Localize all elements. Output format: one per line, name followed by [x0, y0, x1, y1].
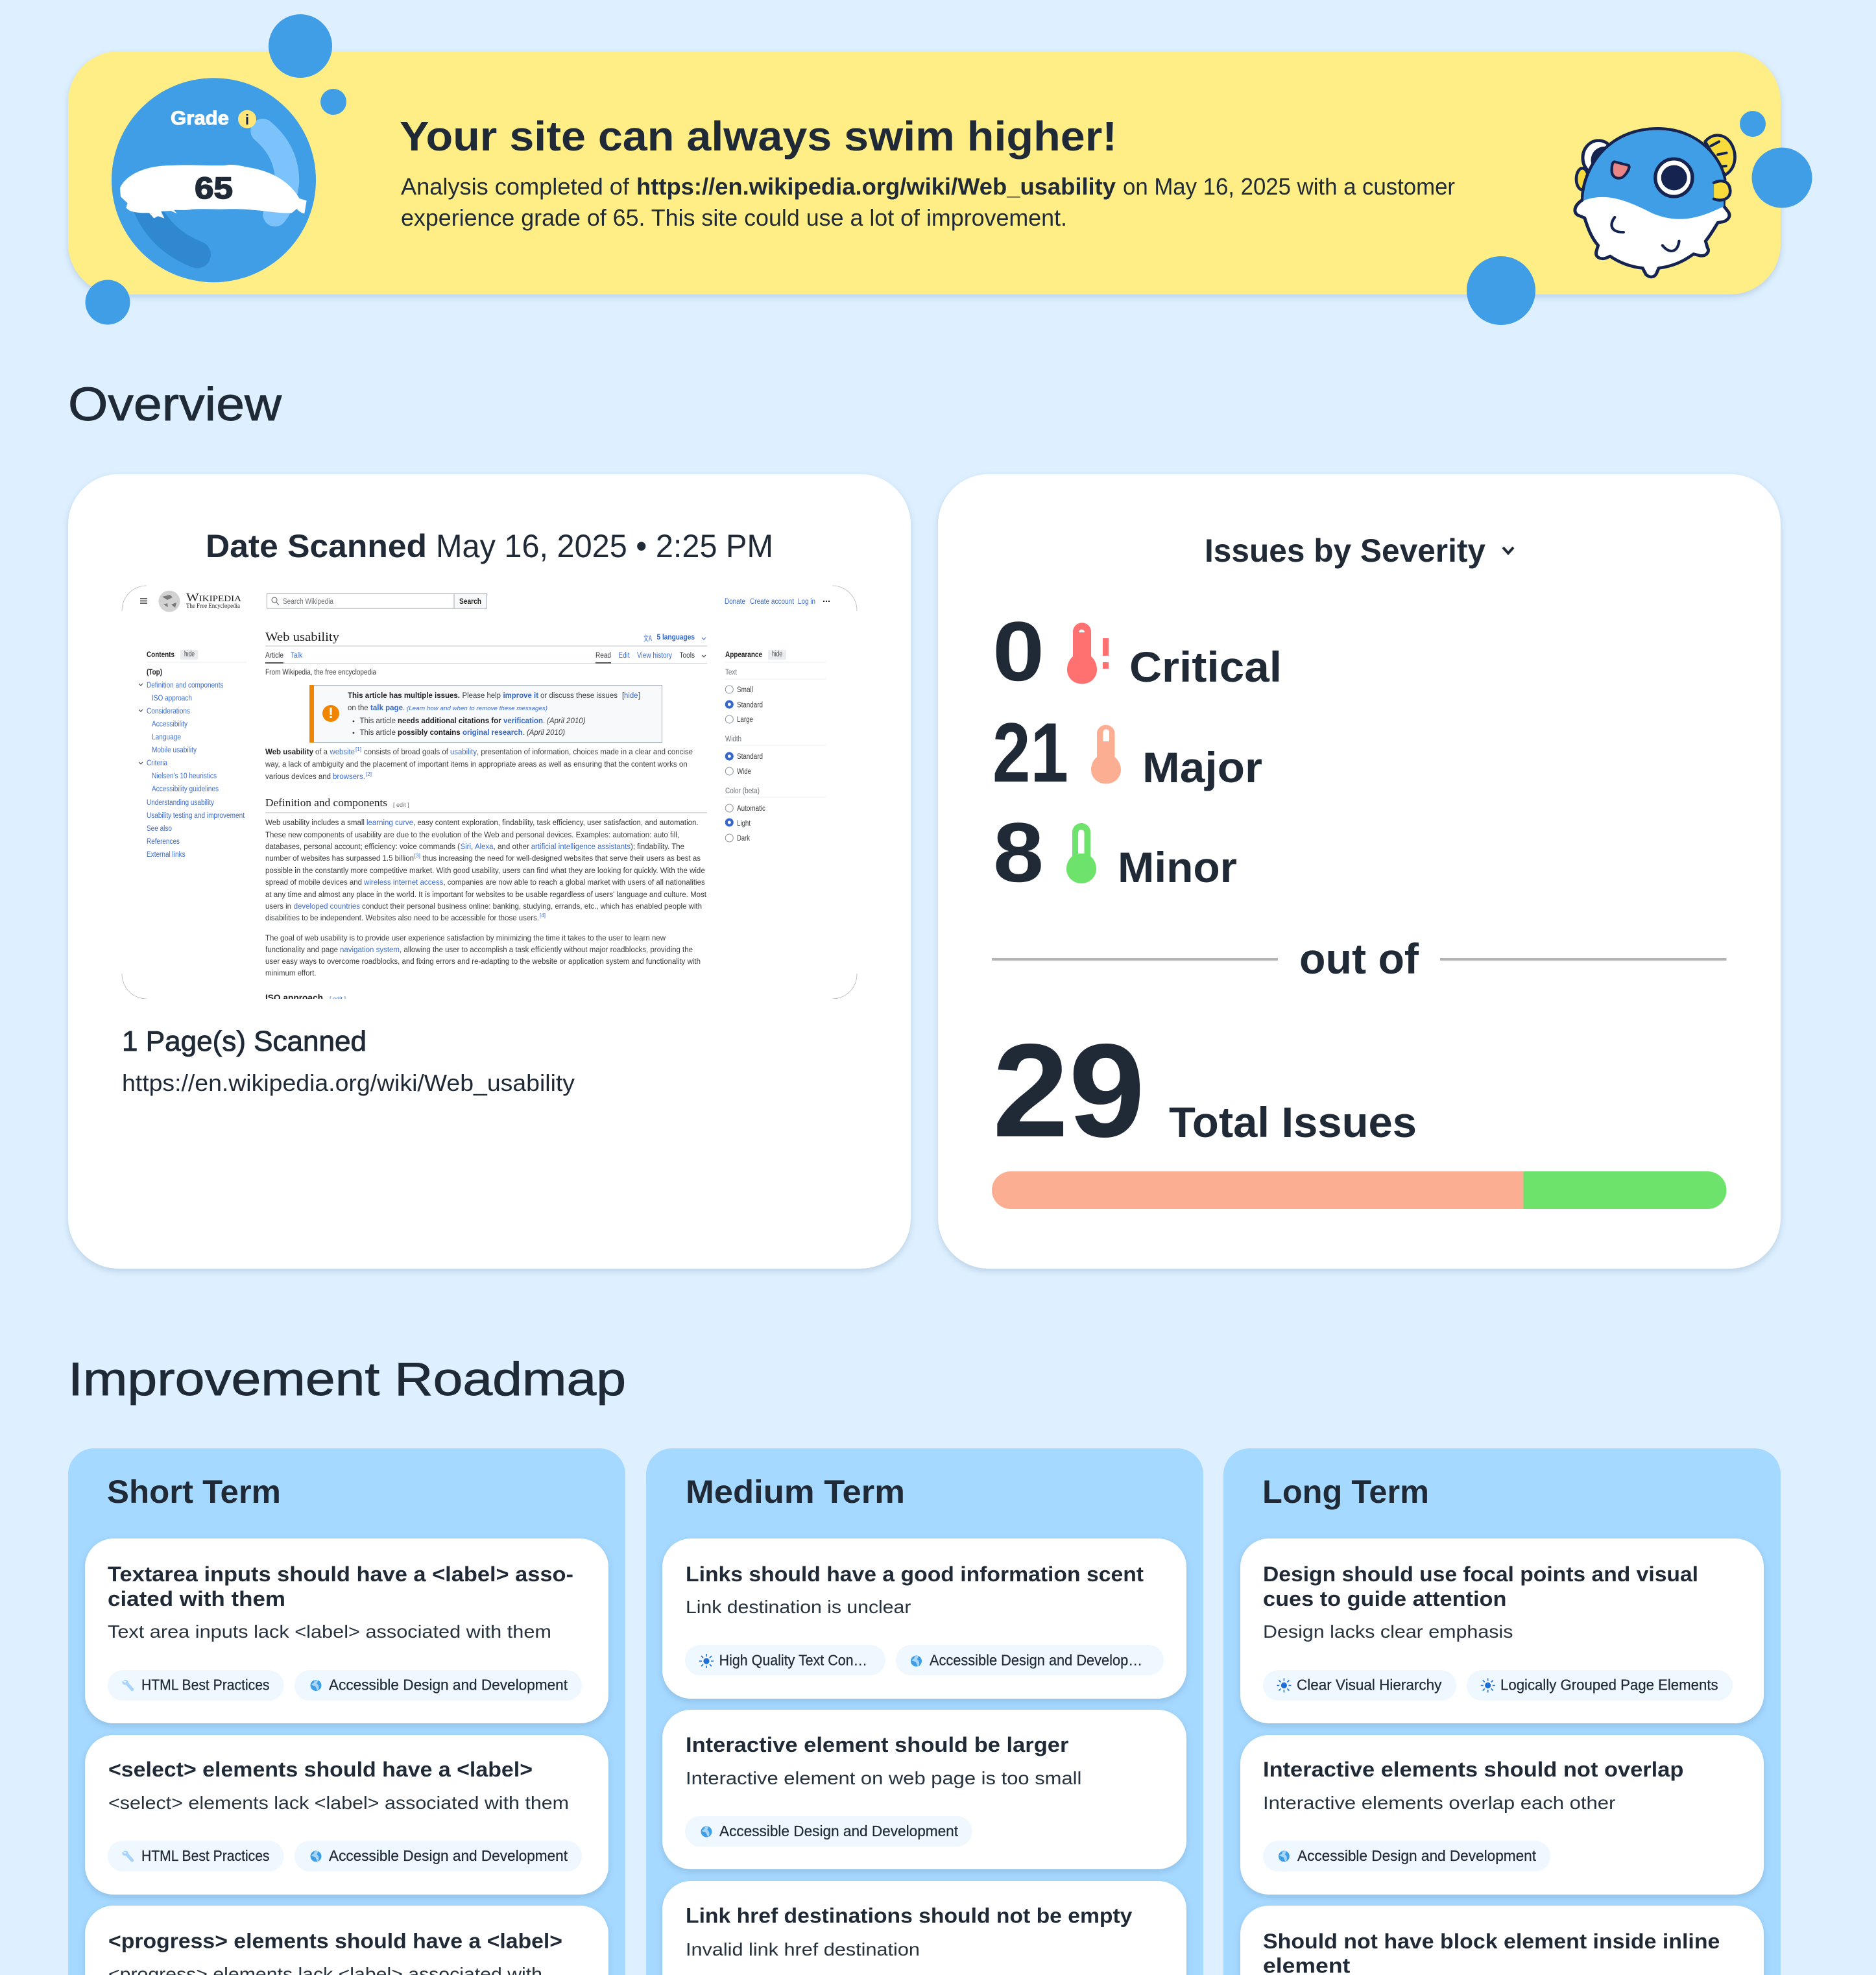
website screenshot: navigation system	[340, 946, 400, 954]
total issues: 29	[992, 1016, 1145, 1165]
column heading: Short Term	[107, 1474, 281, 1510]
card: select label: <select> elements should have a <label>	[108, 1758, 533, 1781]
date scanned: May 16, 2025 • 2:25 PM	[436, 528, 773, 564]
website screenshot: improve it	[503, 692, 538, 700]
website screenshot: Small	[737, 686, 753, 694]
card: textarea label: Accessible Design and Development	[329, 1676, 568, 1693]
website screenshot: way, a lack of ambiguity and the placement of important items in appropriate areas as well as ensuring that the content works on	[265, 761, 688, 769]
severity proportion bar	[992, 1171, 1727, 1209]
card: focal points: Clear Visual Hierarchy	[1297, 1676, 1442, 1693]
icon: dropdown chevron	[1503, 547, 1513, 553]
heading: Improvement Roadmap: Improvement Roadmap	[68, 1354, 626, 1406]
card: overlapping elements	[1240, 1735, 1764, 1895]
card: overlapping elements: Accessible Design and Development	[1297, 1847, 1537, 1864]
website screenshot: (Learn how and when to remove these messages)	[407, 705, 547, 712]
grade badge: 65	[195, 171, 233, 205]
card: empty link href: Link href destinations should not be empty	[686, 1904, 1133, 1928]
website screenshot: (April 2010)	[547, 717, 586, 725]
website screenshot: Appearance	[725, 651, 762, 659]
card background	[68, 474, 911, 1269]
website screenshot: Read	[595, 652, 611, 660]
website screenshot: original research	[463, 729, 523, 737]
card: interactive element size	[662, 1710, 1186, 1869]
card: textarea label: ciated with them	[108, 1587, 285, 1610]
website screenshot: Width	[725, 736, 741, 743]
column background	[1223, 1448, 1781, 1975]
website screenshot: This article	[359, 717, 396, 725]
card: focal points: Design lacks clear emphasis	[1263, 1622, 1513, 1642]
website screenshot: The goal of web usability is to provide user experience satisfaction by minimizing the time it takes to the user to learn new	[265, 935, 666, 942]
website screenshot: disabilities to be independent. Websites also need to be accessible for those users.	[265, 915, 539, 922]
website screenshot: hide	[184, 651, 195, 658]
grade badge: Grade	[171, 108, 229, 129]
card: interactive element size: Accessible Design and Development	[719, 1823, 959, 1839]
heading: Overview: Overview	[68, 379, 282, 431]
website screenshot: 文A	[643, 634, 652, 643]
card: textarea label: Textarea inputs should have a <label> asso-	[108, 1562, 573, 1586]
website screenshot: Nielsen's 10 heuristics	[152, 772, 217, 780]
card: progress label	[85, 1906, 608, 1975]
website screenshot: Web usability	[265, 748, 314, 756]
card: block inside inline: Should not have block element inside inline	[1263, 1930, 1720, 1953]
website screenshot: or discuss these issues	[540, 692, 618, 700]
website screenshot: (Top)	[147, 669, 162, 676]
website screenshot: , easy content exploration, findability, task efficiency, user satisfaction, and automation.	[413, 819, 699, 827]
website screenshot: External links	[147, 851, 186, 859]
column background	[646, 1448, 1203, 1975]
website screenshot: Log in	[798, 598, 815, 606]
card: overlapping elements: Interactive elements should not overlap	[1263, 1758, 1683, 1781]
website screenshot: wireless internet access	[363, 879, 444, 887]
grade badge: i	[245, 112, 249, 128]
website screenshot: needs additional citations for	[398, 717, 501, 725]
website screenshot: thus increasing the need for well-designed websites that serve their users as best as	[423, 855, 701, 863]
card: empty link href: Invalid link href destination	[686, 1939, 920, 1959]
website screenshot: Accessibility guidelines	[152, 785, 219, 793]
card: select label: HTML Best Practices	[141, 1847, 270, 1864]
card: focal points: cues to guide attention	[1263, 1587, 1506, 1610]
panel: medium term	[646, 1448, 1203, 1975]
website screenshot: ISO approach	[152, 695, 192, 702]
website screenshot: spread of mobile devices and	[265, 879, 362, 887]
website screenshot	[122, 586, 857, 1003]
column background	[68, 1448, 625, 1975]
website screenshot: Wikipedia	[186, 591, 242, 604]
minor count: 8	[993, 805, 1044, 900]
website screenshot: ]	[638, 692, 640, 700]
website screenshot: Standard	[737, 753, 763, 761]
website screenshot: minimum effort.	[265, 970, 317, 977]
website screenshot: Article	[265, 652, 283, 660]
critical count: 0	[992, 604, 1044, 699]
icon: pufferfish mascot	[1575, 128, 1735, 277]
website screenshot: website	[330, 748, 355, 756]
website screenshot: This article has multiple issues.	[348, 692, 460, 700]
website screenshot: Usability testing and improvement	[147, 812, 245, 820]
banner background	[68, 51, 1781, 294]
card: focal points: Design should use focal points and visual	[1263, 1562, 1698, 1586]
website screenshot: Create account	[750, 598, 795, 606]
website screenshot: Definition and components	[147, 682, 224, 689]
website screenshot: ISO approach	[265, 992, 323, 1003]
website screenshot: View history	[637, 652, 672, 660]
website screenshot: .	[403, 704, 405, 712]
card: textarea label: HTML Best Practices	[141, 1676, 270, 1693]
critical count: Critical	[1129, 643, 1282, 691]
website screenshot: Standard	[737, 702, 763, 710]
panel: issues by severity	[938, 474, 1781, 1269]
severity heading: Issues by Severity	[1205, 533, 1485, 569]
card: information scent	[662, 1538, 1186, 1699]
card: focal points	[1240, 1538, 1764, 1723]
out of divider: out of	[1299, 935, 1419, 983]
grade badge	[112, 78, 316, 282]
website screenshot: From Wikipedia, the free encyclopedia	[265, 669, 377, 676]
card: interactive element size: Interactive element should be larger	[686, 1733, 1068, 1756]
website screenshot: Tools	[680, 652, 695, 660]
card: block inside inline	[1240, 1906, 1764, 1975]
website screenshot: [	[622, 692, 625, 700]
website screenshot: Alexa	[475, 843, 494, 851]
date scanned: Date Scanned	[206, 528, 427, 564]
website screenshot: Search	[459, 598, 481, 606]
major count: 21	[992, 705, 1068, 800]
website screenshot: Large	[737, 716, 753, 724]
card: select label: <select> elements lack <label> associated with them	[108, 1793, 569, 1813]
panel: scan details	[68, 474, 911, 1269]
total issues	[992, 1016, 1417, 1165]
website screenshot: users in	[265, 903, 291, 911]
website screenshot: Dark	[737, 835, 750, 843]
website screenshot: Wide	[737, 768, 751, 776]
website screenshot: developed countries	[294, 903, 360, 911]
website screenshot: conduct their personal business online: banking, studying, errands, etc., which has enabled people with	[362, 903, 702, 911]
website screenshot: Web usability	[265, 630, 340, 644]
website screenshot: Siri	[461, 843, 471, 851]
website screenshot: possibly contains	[398, 729, 461, 737]
website screenshot: browsers.	[333, 773, 365, 781]
minor count	[993, 805, 1237, 900]
website screenshot: Color (beta)	[725, 787, 760, 795]
website screenshot: Donate	[725, 598, 745, 606]
panel: short term	[68, 1448, 625, 1975]
website screenshot: various devices and	[265, 773, 331, 781]
banner description	[401, 173, 1455, 231]
website screenshot: References	[147, 838, 180, 846]
website screenshot: Search Wikipedia	[283, 598, 334, 606]
website screenshot: , allowing the user to accomplish a task efficiently without major roadblocks, providing the	[400, 946, 693, 954]
decorative bubbles	[86, 14, 1812, 325]
website screenshot: databases, personal account; efficiency: voice commands (	[265, 843, 460, 851]
website screenshot: Please help	[462, 692, 501, 700]
website screenshot: Definition and components	[265, 796, 387, 809]
banner description: Analysis completed of	[401, 173, 630, 200]
website screenshot: Text	[725, 669, 738, 676]
website screenshot: hide	[624, 692, 638, 700]
website screenshot: , presentation of information, choices made in a clear and concise	[477, 748, 693, 756]
website screenshot: Contents	[147, 651, 174, 659]
website screenshot: Criteria	[147, 760, 168, 767]
website screenshot: (April 2010)	[527, 729, 565, 737]
website screenshot: .	[523, 729, 525, 737]
banner headline: Your site can always swim higher!	[400, 113, 1117, 160]
website screenshot: hide	[772, 651, 782, 658]
website screenshot: consists of broad goals of	[364, 748, 449, 756]
website screenshot: Light	[737, 820, 751, 828]
scanned url: https://en.wikipedia.org/wiki/Web_usability	[122, 1070, 575, 1096]
card: select label	[85, 1735, 608, 1895]
column heading: Medium Term	[686, 1474, 905, 1510]
card: information scent: Links should have a good information scent	[686, 1562, 1144, 1586]
website screenshot: Considerations	[147, 708, 190, 715]
card: interactive element size: Interactive element on web page is too small	[686, 1768, 1081, 1788]
website screenshot: See also	[147, 825, 172, 833]
website screenshot: possible in the constantly more competitive market. With good usability, users can find what they are looking for quickly. With the wide	[265, 867, 705, 875]
website screenshot: [3]	[414, 852, 420, 859]
website screenshot: This article	[359, 729, 396, 737]
website screenshot: , companies are now able to reach a global market with users of all nationalities	[443, 879, 705, 887]
website screenshot: Language	[152, 734, 181, 741]
website screenshot: ); findability. The	[631, 843, 684, 851]
website screenshot: number of websites has surpassed 1.5 billion	[265, 855, 414, 863]
website screenshot: usability	[450, 748, 477, 756]
banner description: https://en.wikipedia.org/wiki/Web_usability	[636, 173, 1116, 200]
card: focal points: Logically Grouped Page Elements	[1500, 1676, 1718, 1693]
website screenshot: [1]	[355, 746, 361, 752]
pages scanned count: 1 Page(s) Scanned	[122, 1025, 367, 1057]
website screenshot: Automatic	[737, 805, 765, 813]
website screenshot: Understanding usability	[147, 799, 214, 807]
website screenshot: Talk	[291, 652, 302, 660]
date scanned	[206, 528, 773, 564]
website screenshot: user easy ways to overcome roadblocks, and fixing errors and re-adapting to the website or application system and functionality with	[265, 958, 701, 966]
website screenshot: at any time and almost any place in the world. It is important for websites to be usable regardless of users' language and culture. Most	[265, 891, 707, 899]
out of divider	[992, 935, 1727, 983]
website screenshot: Edit	[619, 652, 630, 660]
banner description: experience grade of 65. This site could use a lot of improvement.	[401, 204, 1067, 231]
panel: long term	[1223, 1448, 1781, 1975]
website screenshot: ,	[471, 843, 473, 851]
website screenshot: [ edit ]	[330, 996, 346, 1003]
card: select label: Accessible Design and Development	[329, 1847, 568, 1864]
website screenshot: learning curve	[367, 819, 413, 827]
website screenshot: .	[543, 717, 545, 725]
card: information scent: Accessible Design and Develop…	[930, 1651, 1142, 1668]
website screenshot: talk page	[370, 704, 403, 712]
website screenshot: verification	[503, 717, 543, 725]
website screenshot: [ edit ]	[393, 802, 409, 809]
column heading: Long Term	[1262, 1474, 1429, 1510]
card: progress label: <progress> elements should have a <label>	[108, 1929, 562, 1952]
major count	[992, 705, 1262, 800]
website screenshot: functionality and page	[265, 946, 338, 954]
website screenshot: Mobile usability	[152, 747, 197, 754]
card: information scent: High Quality Text Con…	[719, 1651, 867, 1668]
card: overlapping elements: Interactive elements overlap each other	[1263, 1793, 1615, 1813]
website screenshot: on the	[348, 704, 368, 712]
card: information scent: Link destination is unclear	[686, 1597, 911, 1617]
website screenshot: artificial intelligence assistants	[531, 843, 631, 851]
major count: Major	[1142, 743, 1262, 791]
website screenshot: 5 languages	[656, 634, 695, 641]
banner: grade summary	[68, 14, 1812, 325]
banner description: on May 16, 2025 with a customer	[1123, 173, 1455, 200]
card: textarea label: Text area inputs lack <label> associated with them	[108, 1622, 551, 1642]
website screenshot: Web usability includes a small	[265, 819, 365, 827]
website screenshot: The Free Encyclopedia	[186, 603, 241, 610]
website screenshot: [2]	[366, 771, 372, 777]
total issues: Total Issues	[1169, 1098, 1417, 1146]
card background	[938, 474, 1781, 1269]
website screenshot: [4]	[540, 912, 546, 918]
website screenshot: , and other	[493, 843, 529, 851]
card: empty link href	[662, 1881, 1186, 1975]
website screenshot: These new components of usability are due to the evolution of the Web and personal devices. Examples: automation: auto fill,	[265, 832, 679, 839]
website screenshot: Accessibility	[152, 721, 187, 728]
website screenshot: of a	[315, 748, 328, 756]
card: textarea label	[85, 1538, 608, 1723]
critical count	[992, 604, 1282, 699]
minor count: Minor	[1118, 843, 1237, 891]
